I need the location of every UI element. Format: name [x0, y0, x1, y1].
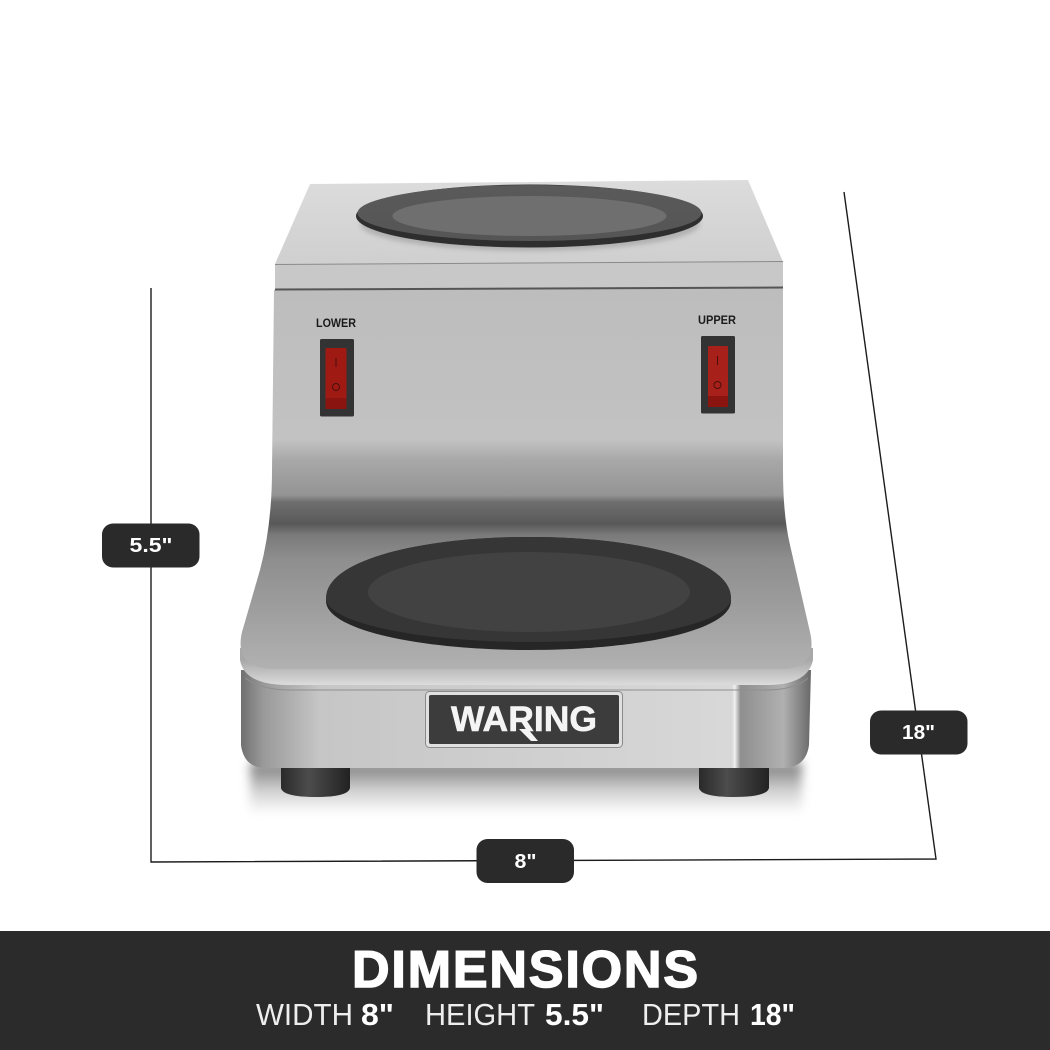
footer title: DIMENSIONS [352, 941, 698, 999]
nameplate [426, 692, 622, 748]
depth label: 18" [902, 722, 935, 744]
dimension lines [151, 192, 936, 862]
deck front lip [240, 648, 813, 685]
footer band [0, 931, 1050, 1050]
switch label lower: LOWER [316, 318, 357, 330]
footer depth [642, 997, 795, 1032]
switch lower [320, 339, 354, 416]
floor shadow [250, 762, 802, 812]
width label: 8" [514, 851, 536, 873]
footer height [425, 997, 604, 1032]
foot right [699, 762, 769, 797]
footer height: 5.5" [545, 997, 604, 1032]
footer height: HEIGHT [425, 997, 535, 1032]
top front lip [275, 262, 783, 290]
body and lower deck [241, 288, 812, 669]
switch upper [701, 336, 735, 414]
footer depth: DEPTH [642, 997, 740, 1032]
upper top surface [275, 180, 783, 268]
footer depth: 18" [750, 997, 795, 1032]
height label [102, 524, 200, 568]
depth label [870, 710, 968, 754]
footer width: WIDTH [256, 997, 353, 1032]
base front [241, 670, 811, 768]
lower hot plate [326, 537, 731, 650]
foot left [281, 762, 350, 797]
upper hot plate [356, 184, 703, 251]
footer width: 8" [361, 997, 394, 1032]
product: coffee warmer [240, 180, 813, 812]
height label: 5.5" [130, 535, 172, 557]
brand logo: WARING [451, 700, 597, 739]
width label [476, 839, 574, 883]
switch label upper: UPPER [698, 315, 737, 327]
